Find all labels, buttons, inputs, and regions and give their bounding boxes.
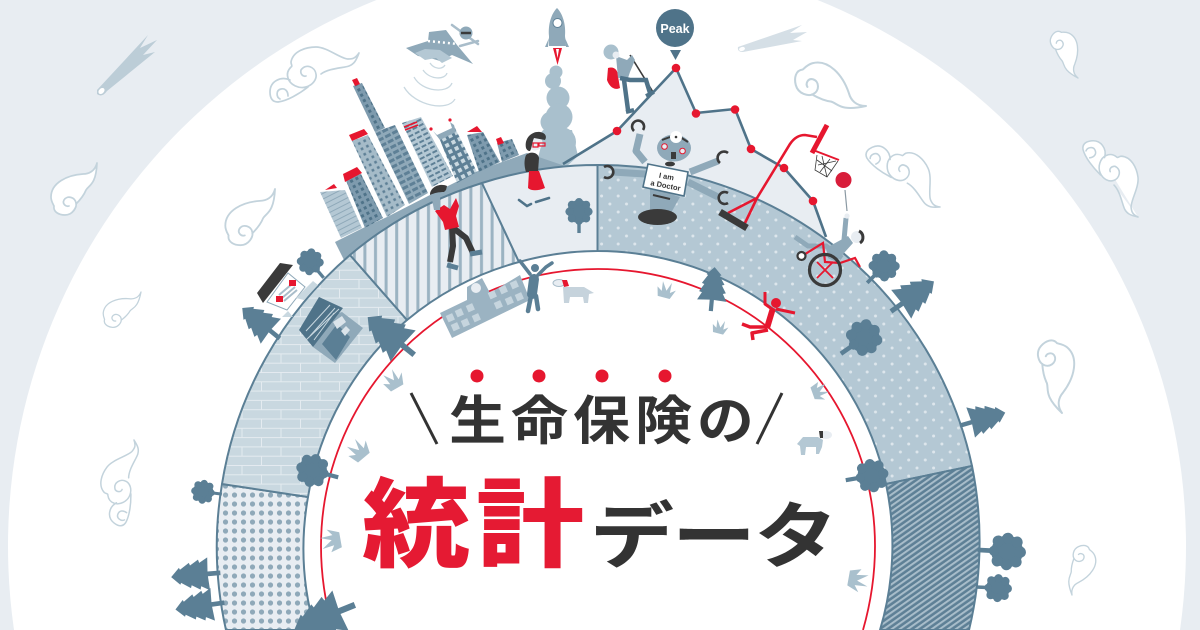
robot doctor — [604, 121, 728, 225]
emphasis dots — [470, 370, 672, 382]
segment dots right — [598, 165, 972, 484]
heading text: 生命保険の — [449, 391, 759, 450]
tree — [890, 279, 934, 318]
grass tufts — [319, 279, 870, 594]
tree — [977, 531, 1027, 571]
tree — [866, 250, 900, 284]
cloud 3 — [864, 130, 945, 226]
city skyline — [320, 78, 519, 238]
inner red circle — [321, 269, 875, 630]
doctor sign: I am — [658, 171, 675, 182]
building 4 tower — [352, 78, 428, 204]
building 6 — [429, 118, 477, 183]
slash left — [411, 393, 437, 444]
woman with glasses — [519, 132, 549, 206]
building 5 — [402, 117, 453, 187]
peak marker: Peak — [660, 22, 690, 36]
cloud 11 — [1055, 542, 1106, 595]
cloud 5 — [51, 163, 97, 215]
title line one — [411, 370, 782, 450]
tree — [368, 316, 416, 362]
segment stripes — [350, 183, 519, 320]
building 2 — [343, 167, 383, 228]
title line two red: 統計 — [362, 471, 584, 580]
building 8 — [496, 137, 519, 162]
falling person in red — [742, 292, 795, 340]
tree — [176, 588, 225, 621]
tree — [296, 454, 339, 487]
tree — [191, 480, 222, 504]
cloud 1 — [270, 47, 359, 102]
building 7 — [467, 126, 500, 172]
cloud 7 — [1082, 135, 1143, 223]
school — [440, 275, 530, 338]
tree — [171, 558, 220, 590]
tree — [840, 319, 882, 356]
second dog — [797, 431, 832, 455]
house — [299, 297, 363, 363]
traditional temple — [257, 263, 318, 317]
slash right — [757, 393, 782, 444]
cloud 10 — [101, 287, 141, 331]
building 1 — [320, 184, 362, 238]
rocket — [545, 8, 569, 65]
segment dots left — [217, 484, 315, 630]
tree — [959, 406, 1006, 438]
dog with red collar — [553, 280, 594, 303]
man in red shirt — [430, 185, 482, 268]
tree — [242, 306, 282, 344]
ring chart — [217, 165, 979, 630]
ball — [836, 172, 852, 211]
peak marker — [656, 9, 694, 60]
comet right — [738, 25, 807, 52]
cloud 6 — [1040, 27, 1094, 78]
title line two dark: データ — [590, 497, 838, 578]
tree — [565, 198, 593, 233]
segment light — [482, 165, 598, 262]
mountain fill — [563, 68, 826, 237]
cloud 9 — [83, 437, 168, 528]
wheelchair athlete — [795, 213, 863, 286]
rocket smoke — [535, 66, 578, 170]
cloud 2 — [791, 53, 866, 122]
mountain line with data points — [563, 64, 826, 237]
building 3 — [349, 129, 405, 217]
comet left — [97, 35, 157, 95]
UFO with alien — [404, 25, 478, 106]
tree — [845, 459, 888, 492]
tree — [697, 267, 726, 312]
doctor sign — [643, 164, 688, 196]
segment hatch — [880, 466, 979, 630]
child with raised arms — [520, 261, 552, 311]
hiker — [604, 44, 654, 112]
trees — [170, 198, 1027, 630]
tree — [978, 574, 1012, 602]
basketball hoop and broom — [720, 125, 839, 228]
tree — [296, 248, 325, 279]
tree — [294, 590, 356, 630]
city base — [335, 153, 565, 262]
sound waves — [404, 63, 455, 106]
cloud 4 — [225, 189, 275, 245]
cloud 8 — [1017, 334, 1097, 413]
doctor sign: a Doctor — [650, 178, 681, 193]
segment brick — [222, 255, 407, 497]
